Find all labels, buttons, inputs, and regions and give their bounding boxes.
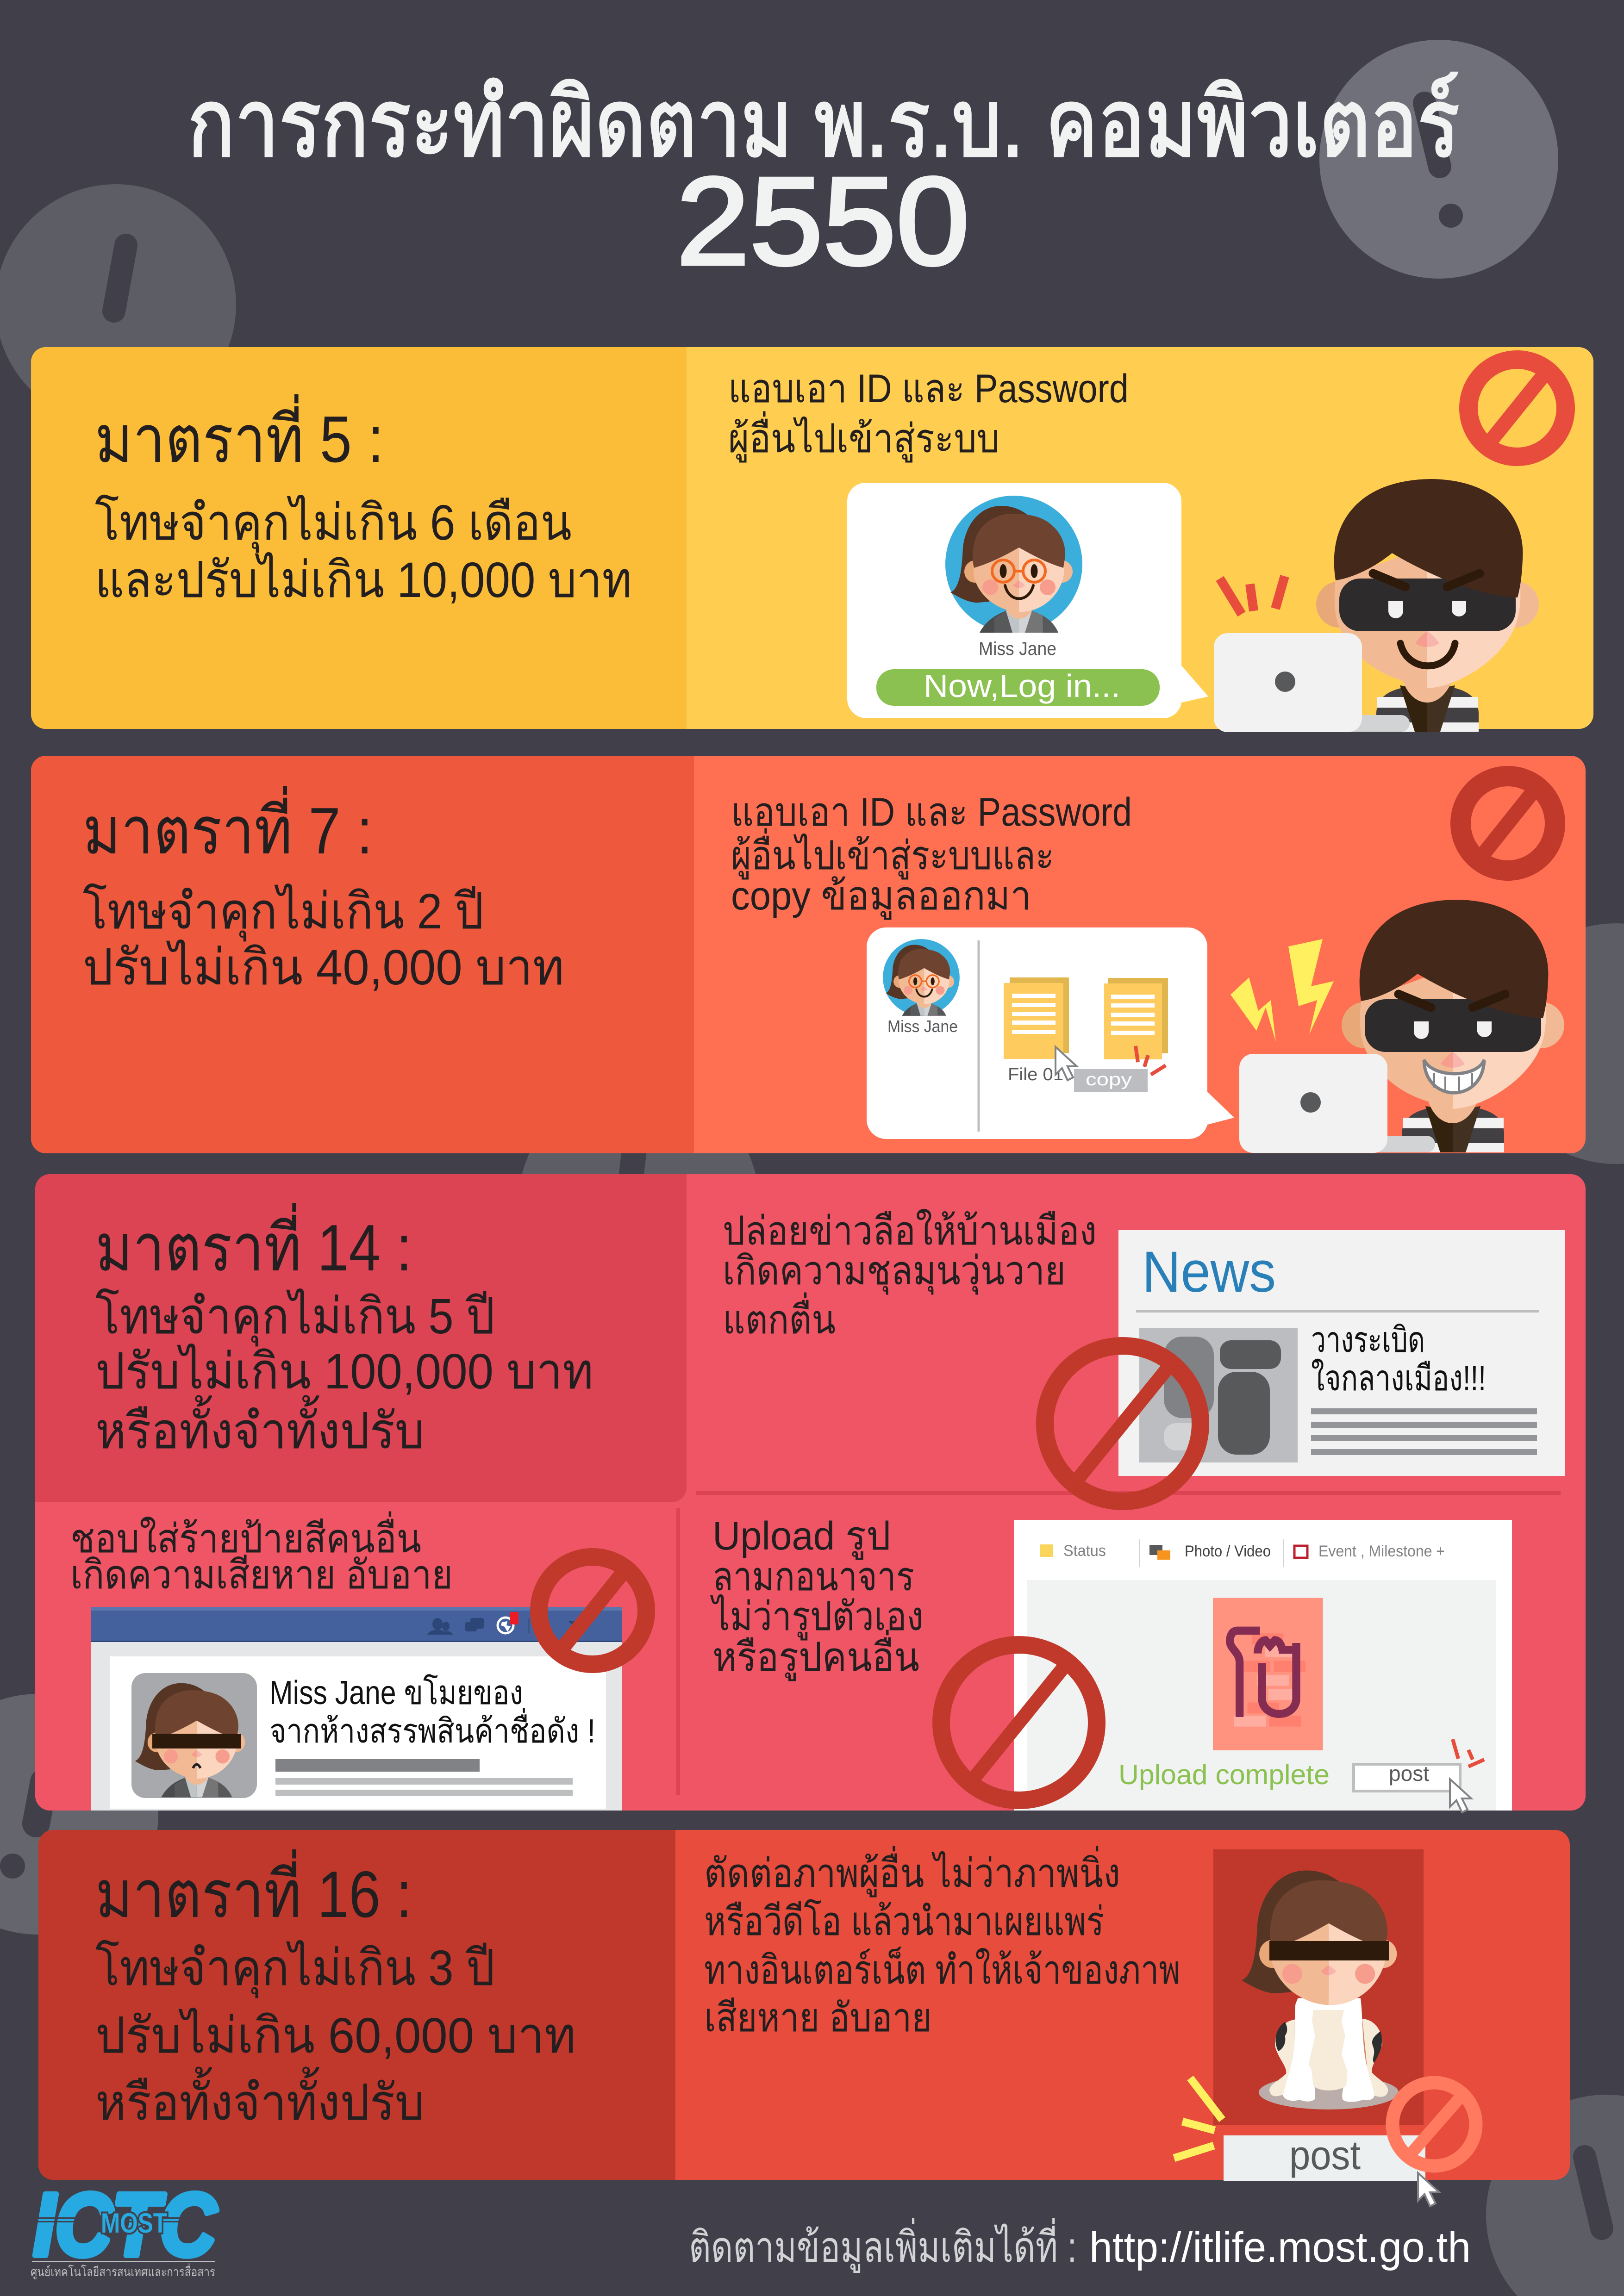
news photo <box>1139 1328 1298 1462</box>
offence description: section 7: แอบเอา ID และ Password <box>731 790 1132 834</box>
icon: prohibition sign <box>539 1557 646 1664</box>
penalty text: section 14: ปรับไม่เกิน 100,000 บาท <box>95 1343 593 1399</box>
tab bar: Photo / Video <box>1185 1543 1271 1560</box>
body: cat with human head <box>1269 1998 1388 2102</box>
icon: copied file <box>1104 978 1168 1059</box>
penalty text: section 5: และปรับไม่เกิน 10,000 บาท <box>95 552 632 608</box>
offence description: section 7 <box>731 790 1132 920</box>
penalty text: section 16: ปรับไม่เกิน 60,000 บาท <box>95 2007 576 2063</box>
illustration: masked thief with laptop <box>1239 900 1564 1153</box>
heading: News: News <box>1142 1240 1276 1304</box>
tab bar <box>1040 1539 1445 1567</box>
button: copy: copy <box>1086 1070 1132 1089</box>
button: post <box>1224 2132 1425 2181</box>
penalty text: section 7: โทษจำคุกไม่เกิน 2 ปี <box>83 883 484 942</box>
censored uploaded image <box>1213 1598 1323 1750</box>
icon: click marks <box>1136 1046 1166 1075</box>
penalty text: section 7 <box>83 883 564 995</box>
upload mock-up <box>1014 1520 1512 1812</box>
offence description: image editing: ตัดต่อภาพผู้อื่น ไม่ว่าภาพนิ่ง <box>704 1846 1120 1898</box>
icon: prohibition sign <box>941 1645 1097 1800</box>
illustration: masked thief with laptop <box>1214 479 1539 732</box>
icon: thief grin <box>1424 1060 1484 1093</box>
offence description: rumours <box>723 1209 1097 1342</box>
card: news article <box>1118 1230 1565 1476</box>
panel: section 7 <box>31 756 1586 1153</box>
offence description: section 7: ผู้อื่นไปเข้าสู่ระบบและ <box>731 828 1054 880</box>
decorative exclamation circle: right <box>1495 923 1624 1164</box>
panel: section 16 <box>38 1830 1570 2206</box>
decorative exclamation circle: top left <box>0 184 236 425</box>
label: Miss Jane: Miss Jane <box>887 1017 958 1036</box>
penalty text: section 16: โทษจำคุกไม่เกิน 3 ปี <box>95 1940 495 1998</box>
offence description: rumours: แตกตื่น <box>723 1292 836 1342</box>
penalty text: section 14 <box>95 1288 593 1459</box>
penalty text: section 14: โทษจำคุกไม่เกิน 5 ปี <box>95 1288 495 1347</box>
speech bubble: login <box>847 483 1208 718</box>
offence description: section 5: แอบเอา ID และ Password <box>728 367 1129 411</box>
offence description: section 5: ผู้อื่นไปเข้าสู่ระบบ <box>728 411 999 463</box>
button: post: post <box>1389 1761 1429 1786</box>
icon: cursor <box>1056 1047 1077 1080</box>
footer text: http://itlife.most.go.th <box>1089 2224 1471 2271</box>
decorative exclamation circle: lower right <box>1486 2095 1624 2296</box>
button: post: post <box>1289 2132 1361 2178</box>
offence description: image editing: หรือวีดีโอ แล้วนำมาเผยแพร่ <box>704 1899 1104 1944</box>
post text: จากห้างสรรพสินค้าชื่อดัง ! <box>269 1708 595 1750</box>
penalty text: section 5 <box>95 494 632 608</box>
heading: section 14: มาตราที่ 14 : <box>95 1203 412 1285</box>
icon: lightning bolts <box>1230 939 1334 1042</box>
illustration: edited image <box>1213 1849 1424 2125</box>
offence description: rumours: ปล่อยข่าวลือให้บ้านเมือง <box>723 1209 1097 1253</box>
avatar: defamed person <box>131 1673 257 1798</box>
icons: notification bar <box>427 1612 578 1635</box>
heading: section 7: มาตราที่ 7 : <box>83 786 373 868</box>
offence description: upload: ลามกอนาจาร <box>712 1555 914 1599</box>
panel: section 5 <box>31 347 1593 732</box>
button: post <box>1354 1761 1460 1791</box>
icon: prohibition sign <box>1468 360 1566 457</box>
avatar: Miss Jane <box>883 939 960 1016</box>
offence description: defamation: เกิดความเสียหาย อับอาย <box>70 1553 453 1597</box>
panel: section 14 <box>35 1174 1586 1812</box>
status: upload complete: Upload complete <box>1118 1759 1330 1790</box>
offence description: upload <box>710 1514 924 1681</box>
icon: file 01: File 01 <box>1008 1065 1063 1084</box>
offence description: image editing: ทางอินเตอร์เน็ต ทำให้เจ้าของภาพ <box>704 1947 1181 1992</box>
footer text: ติดตามข้อมูลเพิ่มเติมได้ที่ : <box>689 2218 1077 2273</box>
speech bubble: copying files <box>867 927 1234 1139</box>
icon: prohibition sign <box>1045 1346 1200 1501</box>
offence description: rumours: เกิดความชุลมุนวุ่นวาย <box>723 1249 1066 1295</box>
news headline: ใจกลางเมือง!!! <box>1311 1358 1486 1398</box>
icon: prohibition sign <box>1393 2083 1476 2166</box>
button: copy <box>1074 1069 1148 1092</box>
logo: ICTC MOST: ศูนย์เทคโนโลยีสารสนเทศและการสื่อสาร <box>31 2263 215 2279</box>
offence description: image editing: เสียหาย อับอาย <box>704 1996 932 2040</box>
news headline: วางระเบิด <box>1311 1320 1425 1360</box>
offence description: defamation: ชอบใส่ร้ายป้ายสีคนอื่น <box>70 1511 421 1561</box>
title <box>187 70 1460 291</box>
news headline <box>1311 1320 1486 1398</box>
offence description: upload: ไม่ว่ารูปตัวเอง <box>710 1594 924 1641</box>
heading: section 16: มาตราที่ 16 : <box>95 1849 412 1931</box>
penalty text: section 5: โทษจำคุกไม่เกิน 6 เดือน <box>95 494 572 553</box>
icon: click rays <box>1174 2078 1222 2158</box>
tab bar: Status <box>1063 1542 1106 1560</box>
title: 2550 <box>676 152 969 291</box>
decorative exclamation circle: lower left <box>0 1694 158 1935</box>
button: log in: Now,Log in... <box>924 668 1120 704</box>
offence description: defamation <box>70 1511 453 1597</box>
icon: file 01 <box>1004 977 1069 1084</box>
offence description: image editing <box>704 1846 1181 2040</box>
decorative exclamation circle: middle <box>518 1083 759 1324</box>
offence description: section 7: copy ข้อมูลออกมา <box>731 874 1031 920</box>
penalty text: section 16: หรือทั้งจำทั้งปรับ <box>95 2066 425 2130</box>
icon: prohibition sign <box>1461 776 1555 871</box>
heading: section 5: มาตราที่ 5 : <box>95 394 384 476</box>
icon: click marks <box>1453 1739 1484 1767</box>
icon: alert marks <box>1220 576 1285 614</box>
avatar: Miss Jane <box>945 496 1082 633</box>
penalty text: section 7: ปรับไม่เกิน 40,000 บาท <box>83 939 564 995</box>
offence description: upload: หรือรูปคนอื่น <box>712 1630 919 1681</box>
button: log in <box>876 668 1160 706</box>
decorative exclamation circle: top right <box>1319 40 1558 279</box>
icon: cursor <box>1418 2173 1439 2206</box>
logo: ICTC MOST: MOST <box>101 2208 167 2239</box>
penalty text: section 14: หรือทั้งจำทั้งปรับ <box>95 1395 425 1459</box>
icon: cursor <box>1450 1779 1471 1812</box>
social media mock-up <box>91 1607 622 1811</box>
woman head with censor bar <box>1242 1870 1397 2005</box>
logo: ICTC MOST: ICTC <box>33 2175 217 2274</box>
label: Miss Jane: Miss Jane <box>979 639 1056 659</box>
tab bar: Event , Milestone + <box>1318 1543 1445 1560</box>
offence description: section 5 <box>728 367 1129 463</box>
penalty text: section 16 <box>95 1940 576 2130</box>
post text: Miss Jane ขโมยของ <box>269 1674 523 1711</box>
footer text <box>689 2218 1471 2273</box>
post text <box>269 1674 595 1750</box>
offence description: upload: Upload รูป <box>712 1514 891 1560</box>
